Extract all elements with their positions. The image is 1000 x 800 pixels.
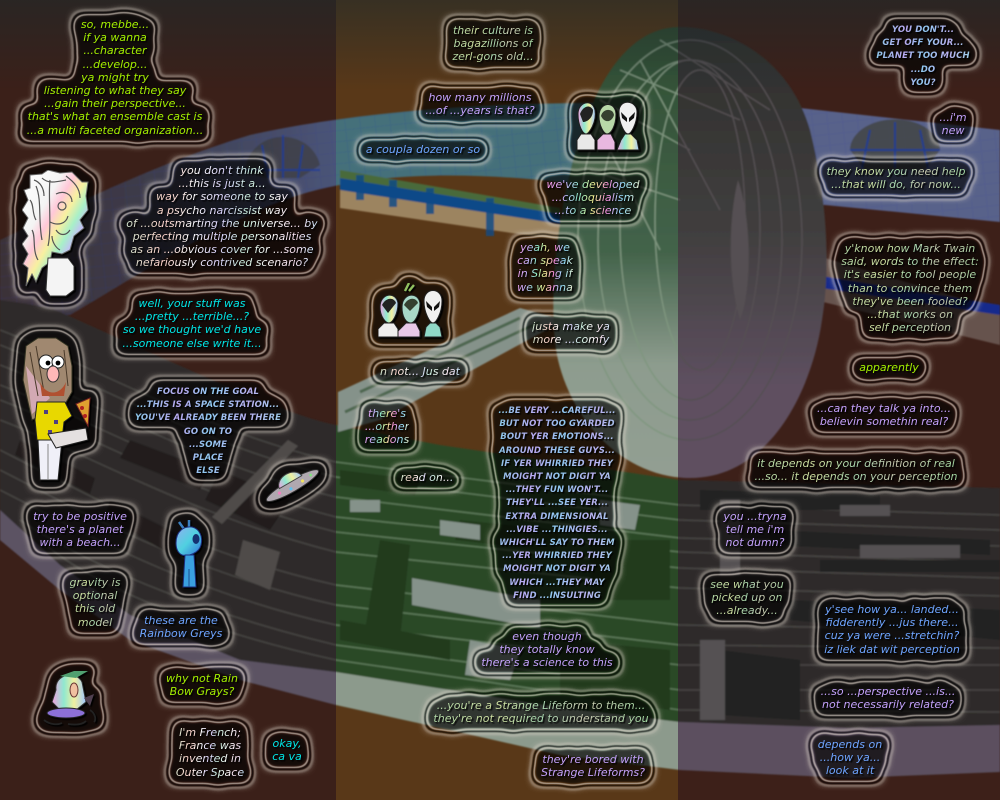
text: gravity xyxy=(70,576,120,629)
text: be very careful: ...YER WHIRRIED THEY xyxy=(502,551,612,561)
text: french xyxy=(176,726,244,779)
text: y'see: y'see how ya... landed... xyxy=(825,603,959,616)
text: talk ya into xyxy=(803,389,964,440)
text: see what you: see what you xyxy=(710,578,784,591)
text: y'see: fidderently ...jus there... xyxy=(825,616,959,629)
text: you don't get off: YOU? xyxy=(910,78,936,88)
text: so mebbe: if ya wanna xyxy=(83,31,147,44)
text: tryna: not dumn? xyxy=(725,536,784,549)
left column station xyxy=(0,118,336,706)
text: yeah we xyxy=(517,241,573,294)
text: be very careful: ...BE VERY ...CAREFUL... xyxy=(498,406,616,416)
text: your stuff: so we thought we'd have xyxy=(123,323,261,336)
text: it depends: it depends on your definition of real xyxy=(757,457,955,470)
text: orther readons: readons xyxy=(365,433,409,446)
text: you don't think: you don't think xyxy=(181,164,263,177)
text: talk ya into: believin somethin real? xyxy=(820,415,948,428)
text: mark twain: self perception xyxy=(869,321,951,334)
text: yeah we: we wanna xyxy=(517,281,573,294)
text: y'see: cuz ya were ...stretchin? xyxy=(825,629,959,642)
text: mark twain: said, words to the effect: xyxy=(841,255,979,268)
text: developed: ...to a science xyxy=(555,204,631,217)
text: bored: Strange Lifeforms? xyxy=(541,766,645,779)
text: be very careful: MOIGHT NOT DIGIT YA xyxy=(503,472,611,482)
text: be very careful: BOUT YER EMOTIONS... xyxy=(500,432,614,442)
text: focus on the goal: ELSE xyxy=(196,466,220,476)
text: so mebbe: ...gain their perspective... xyxy=(44,97,186,110)
text: french: Outer Space xyxy=(176,766,244,779)
text: french: invented in xyxy=(179,752,241,765)
text: it depends: ...so... it depends on your perception xyxy=(754,470,958,483)
text: focus on the goal: PLACE xyxy=(193,453,223,463)
text: be very careful: AROUND THESE GUYS... xyxy=(499,446,615,456)
text: justa make ya: justa make ya xyxy=(532,320,610,333)
text: perspective: ...so ...perspective ...is... xyxy=(821,685,955,698)
text: depends on: ...how ya... xyxy=(820,751,880,764)
text: jus dat: n not... Jus dat xyxy=(380,365,460,378)
text: so mebbe: ...character xyxy=(83,44,147,57)
text: developed xyxy=(546,178,640,218)
text: mark twain: than to convince them xyxy=(848,282,972,295)
text: rainbow greys: Rainbow Greys xyxy=(140,627,222,640)
text: rain bow grays: why not Rain xyxy=(166,672,238,685)
text: depends on: look at it xyxy=(826,764,874,777)
text: be very careful: BUT NOT TOO GYARDED xyxy=(499,419,615,429)
text: focus on the goal: ...SOME xyxy=(189,440,227,450)
text: justa make ya: more ...comfy xyxy=(533,333,609,346)
text: you don't get off: PLANET TOO MUCH xyxy=(876,51,970,61)
text: you don't think xyxy=(126,164,318,270)
text: focus on the goal: FOCUS ON THE GOAL xyxy=(157,387,259,397)
text: you don't think: of ...outsmarting the universe... by xyxy=(126,217,318,230)
text: be very careful xyxy=(498,405,616,603)
text: focus on the goal xyxy=(135,386,281,478)
text: orther readons: ...orther xyxy=(365,420,409,433)
text: coupla dozen: a coupla dozen or so xyxy=(366,143,480,156)
icon: wild haired man xyxy=(7,155,104,312)
text: you don't get off: GET OFF YOUR... xyxy=(882,38,964,48)
text: even though: there's a science to this xyxy=(481,656,613,669)
text: see what you: ...already... xyxy=(716,604,778,617)
text: gravity: this old xyxy=(75,602,115,615)
text: bored: they're bored with xyxy=(542,753,644,766)
text: tryna xyxy=(708,498,800,561)
text: so mebbe: listening to what they say xyxy=(44,84,186,97)
left column background xyxy=(0,0,336,800)
text: mark twain: it's easier to fool people xyxy=(844,268,976,281)
text: french: France was xyxy=(179,739,241,752)
text: you don't think: perfecting multiple personalities xyxy=(133,230,311,243)
text: you don't get off xyxy=(876,24,970,90)
text: french: I'm French; xyxy=(179,726,241,739)
text: you don't get off: YOU DON'T... xyxy=(892,25,954,35)
text: gravity: gravity is xyxy=(70,576,120,589)
text: gravity: model xyxy=(78,616,112,629)
text: apparently: apparently xyxy=(859,361,919,374)
text: bored xyxy=(526,741,660,793)
text: y'see: iz liek dat wit perception xyxy=(824,643,960,656)
icon: flying saucer xyxy=(251,454,334,517)
top shade xyxy=(0,0,1000,90)
text: mark twain xyxy=(841,242,979,334)
text: strange lifeform xyxy=(433,699,649,725)
text: mark twain: they've been fooled? xyxy=(852,295,968,308)
text: be very careful: ...VIBE ...THINGIES... xyxy=(506,525,608,535)
text: developed: we've developed xyxy=(546,178,640,191)
text: be very careful: WHICH ...THEY MAY xyxy=(509,578,605,588)
text: your stuff: ...pretty ...terrible...? xyxy=(135,310,249,323)
text: gravity: optional xyxy=(73,589,117,602)
text: your stuff xyxy=(108,284,276,362)
text: even though: they totally know xyxy=(499,643,595,656)
text: i'm new: new xyxy=(942,124,964,137)
text: try to be positive: there's a planet xyxy=(37,523,123,536)
text: depends on xyxy=(804,725,896,789)
text: your stuff: well, your stuff was xyxy=(138,297,246,310)
text: you don't think: a psycho narcissist way xyxy=(157,204,287,217)
text: how many millions: ...of ...years is that? xyxy=(425,104,535,117)
text: try to be positive: try to be positive xyxy=(33,510,127,523)
icon: three aliens lower xyxy=(363,268,458,352)
text: be very careful: FIND ...INSULTING xyxy=(513,591,601,601)
text: be very careful: ...THEY FUN WON'T... xyxy=(506,485,608,495)
text: they know xyxy=(826,165,966,191)
text: ca va: okay, xyxy=(272,737,301,750)
text: orther readons: there's xyxy=(368,407,406,420)
text: focus on the goal: YOU'VE ALREADY BEEN THERE xyxy=(135,413,281,423)
text: ca va xyxy=(258,724,316,775)
text: strange lifeform: they're not required to understand you xyxy=(433,712,649,725)
icon: meditating figure xyxy=(29,656,111,740)
text: be very careful: MOIGHT NOT DIGIT YA xyxy=(503,564,611,574)
middle column station xyxy=(336,26,678,771)
text: try to be positive: with a beach... xyxy=(39,536,121,549)
text: orther readons xyxy=(365,407,409,447)
text: yeah we: yeah, we xyxy=(520,241,570,254)
text: mark twain: y'know how Mark Twain xyxy=(845,242,975,255)
text: perspective xyxy=(806,672,969,725)
icon: long haired man holding pizza box xyxy=(8,322,106,496)
text: talk ya into: ...can they talk ya into... xyxy=(817,402,951,415)
text: their culture: bagazillions of xyxy=(454,37,532,50)
text: yeah we: can speak xyxy=(517,254,573,267)
text: rainbow greys xyxy=(125,601,237,654)
text: perspective: not necessarily related? xyxy=(822,698,954,711)
text: you don't think: as an ...obvious cover for ...some xyxy=(130,243,314,256)
text: see what you: picked up on xyxy=(712,591,782,604)
icon: blue alien xyxy=(160,505,217,602)
text: so mebbe xyxy=(12,5,217,151)
text: strange lifeform: ...you're a Strange Lifeform to them... xyxy=(437,699,645,712)
text: their culture xyxy=(452,24,534,64)
text: depends on: depends on xyxy=(818,738,882,751)
text: so mebbe: so, mebbe... xyxy=(81,18,149,31)
text: rainbow greys: these are the xyxy=(144,614,218,627)
text: be very careful: WHICH'LL SAY TO THEM xyxy=(499,538,615,548)
text: so mebbe: that's what an ensemble cast is xyxy=(28,110,202,123)
text: so mebbe: ...develop... xyxy=(83,58,147,71)
middle column background xyxy=(336,0,678,800)
text: be very careful: EXTRA DIMENSIONAL xyxy=(505,512,609,522)
text: their culture: zerl-gons old... xyxy=(452,50,534,63)
text: how many millions: how many millions xyxy=(428,91,532,104)
text: focus on the goal: ...THIS IS A SPACE STATION... xyxy=(137,400,279,410)
text: read on: read on... xyxy=(401,471,453,484)
text: rain bow grays: Bow Grays? xyxy=(170,685,234,698)
icon: three aliens top xyxy=(562,86,654,166)
text: try to be positive xyxy=(19,497,141,561)
text: mark twain: ...that works on xyxy=(867,308,953,321)
text: they know: they know you need help xyxy=(826,165,966,178)
right column background xyxy=(678,0,1000,800)
text: justa make ya xyxy=(532,320,610,346)
text: tryna: you ...tryna xyxy=(723,510,787,523)
text: even though: even though xyxy=(512,630,582,643)
right column station xyxy=(678,28,1000,778)
text: it depends xyxy=(754,457,958,483)
text: rain bow grays xyxy=(152,659,252,712)
text: you don't think: nefariously contrived scenario? xyxy=(136,256,308,269)
text: ca va: ca va xyxy=(272,750,302,763)
text: so mebbe: ...a multi faceted organization... xyxy=(27,124,203,137)
text: be very careful: THEY'LL ...SEE YER... xyxy=(506,498,608,508)
text: i'm new: ...i'm xyxy=(939,111,967,124)
text: i'm new xyxy=(926,98,981,148)
text: you don't think: way for someone to say xyxy=(156,190,288,203)
text: be very careful: IF YER WHIRRIED THEY xyxy=(501,459,613,469)
text: tryna: tell me i'm xyxy=(726,523,784,536)
text: developed: ...colloquialism xyxy=(552,191,634,204)
text: how many millions xyxy=(412,78,549,131)
text: you don't get off: ...DO xyxy=(911,65,935,75)
text: your stuff: ...someone else write it... xyxy=(122,337,262,350)
text: focus on the goal: GO ON TO xyxy=(184,427,232,437)
text: yeah we: in Slang if xyxy=(518,267,572,280)
text: so mebbe: ya might try xyxy=(81,71,149,84)
text: they know: ...that will do, for now... xyxy=(831,178,961,191)
text: you don't think: ...this is just a... xyxy=(178,177,266,190)
text: y'see xyxy=(810,590,974,670)
text: see what you xyxy=(710,578,784,618)
text: their culture: their culture is xyxy=(453,24,533,37)
text: even though xyxy=(468,617,627,681)
